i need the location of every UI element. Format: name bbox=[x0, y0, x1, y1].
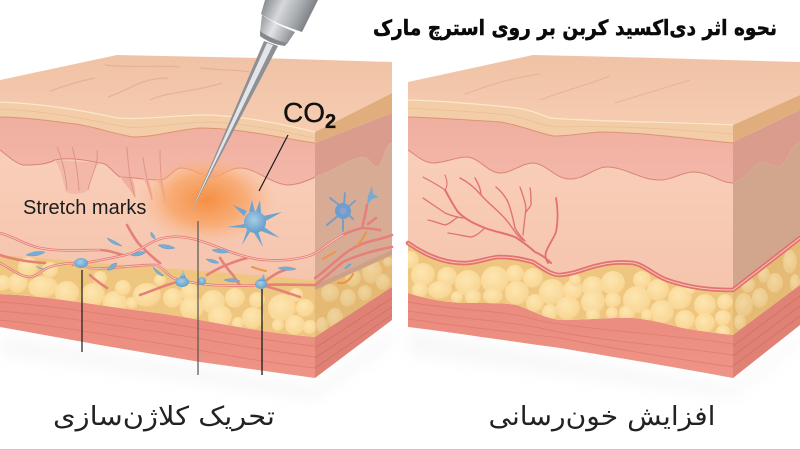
right side face bbox=[733, 95, 800, 378]
fat layer with adipocytes bbox=[401, 240, 800, 340]
top skin surface bbox=[0, 55, 392, 132]
orange collagen fragments bbox=[252, 232, 366, 283]
muscle front bbox=[408, 293, 733, 378]
bottom rule bbox=[0, 449, 800, 450]
dermis lower edge line bbox=[0, 150, 315, 185]
small fibroblast on side face bbox=[327, 193, 355, 231]
laser needle handpiece bbox=[190, 0, 318, 214]
large fibroblast cell bbox=[227, 200, 282, 247]
label: CO2: CO bbox=[283, 97, 325, 128]
panel: treatment skin block bbox=[0, 0, 393, 400]
blue fibroblast spindles bbox=[26, 232, 351, 282]
top skin surface bbox=[408, 55, 800, 125]
surface wrinkles bbox=[465, 74, 690, 103]
front dermis layer bbox=[0, 102, 315, 185]
epidermis band bbox=[0, 102, 315, 143]
fat layer with adipocytes bbox=[0, 250, 393, 340]
blue fibroblast nuclei bbox=[74, 258, 267, 289]
soft shadow under left block bbox=[0, 330, 392, 400]
caption: increased blood supply: افزایش خون‌رسانی bbox=[488, 402, 716, 432]
surface stretch wrinkles bbox=[50, 65, 250, 100]
branching blood vessels bbox=[423, 175, 558, 263]
epidermis band bbox=[408, 100, 733, 143]
vessel band along fat boundary bbox=[408, 238, 800, 290]
peach dermis bbox=[408, 150, 733, 290]
peach reticular dermis bbox=[0, 150, 315, 285]
dermis lower edge line bbox=[408, 150, 733, 183]
label: CO2: 2 bbox=[325, 111, 336, 133]
caption: collagen stimulation: تحریک کلاژن‌سازی bbox=[53, 402, 275, 432]
CO2 orange heat zone bbox=[137, 154, 277, 246]
stretch mark tears bbox=[55, 147, 166, 204]
muscle front bbox=[0, 294, 315, 378]
dermis layer bbox=[408, 100, 733, 183]
collagen fibres bbox=[0, 205, 392, 297]
blue receptor on side bbox=[367, 186, 379, 205]
soft shadow under right block bbox=[408, 330, 800, 398]
right side face bbox=[315, 93, 392, 378]
panel: blood supply skin block bbox=[401, 55, 800, 398]
label: stretch marks: Stretch marks bbox=[23, 197, 146, 219]
leader lines bbox=[82, 135, 288, 375]
